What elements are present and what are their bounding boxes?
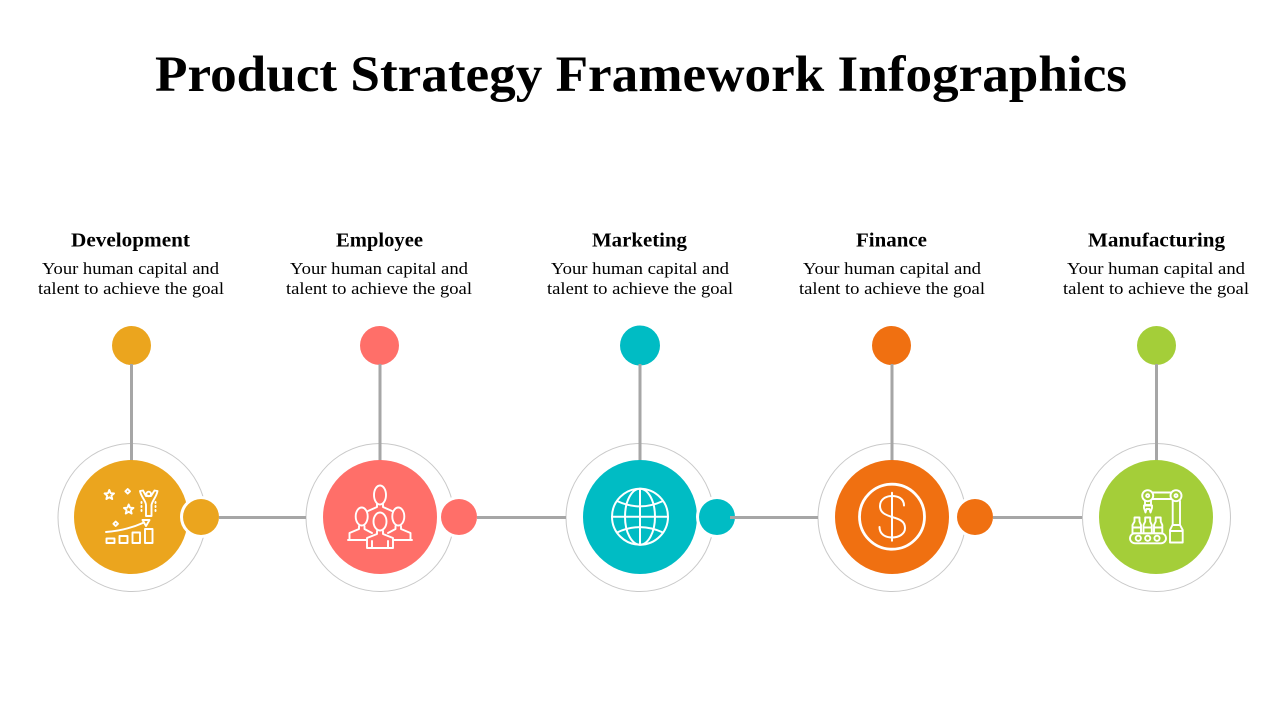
icon: team of people bbox=[348, 486, 412, 548]
step: manufacturing bbox=[1063, 230, 1249, 592]
side dot: employee bbox=[441, 499, 477, 535]
disc: manufacturing bbox=[1099, 460, 1213, 574]
text block: marketing bbox=[547, 259, 733, 298]
text block: employee: talent to achieve the goal bbox=[286, 279, 472, 298]
stem: marketing bbox=[638, 364, 642, 462]
top dot: finance bbox=[872, 326, 911, 365]
side dot: marketing bbox=[699, 499, 735, 535]
step: marketing bbox=[547, 230, 735, 592]
heading: marketing: Marketing bbox=[592, 230, 687, 252]
ring: employee bbox=[306, 444, 454, 592]
heading: manufacturing: Manufacturing bbox=[1088, 230, 1225, 252]
text block: finance: Your human capital and bbox=[803, 259, 982, 278]
disc: development bbox=[74, 460, 188, 574]
ring: manufacturing bbox=[1082, 444, 1230, 592]
text block: finance: talent to achieve the goal bbox=[799, 279, 985, 298]
connector: finance to manufacturing bbox=[993, 516, 1082, 519]
text block: finance bbox=[799, 259, 985, 298]
icon: success growth chart bbox=[105, 489, 158, 543]
step: finance bbox=[799, 230, 993, 592]
connector: marketing to finance bbox=[730, 516, 818, 519]
title: Product Strategy Framework Infographics bbox=[155, 47, 1127, 103]
icon: globe bbox=[612, 489, 668, 545]
stem: employee bbox=[378, 364, 382, 462]
step: employee bbox=[286, 230, 477, 592]
step: development bbox=[38, 230, 224, 592]
text block: manufacturing: talent to achieve the goal bbox=[1063, 279, 1249, 298]
top dot: employee bbox=[360, 326, 399, 365]
disc: employee bbox=[323, 460, 437, 574]
text block: development: talent to achieve the goal bbox=[38, 279, 224, 298]
text block: marketing: Your human capital and bbox=[551, 259, 730, 278]
side dot: development bbox=[183, 499, 219, 535]
text block: development: Your human capital and bbox=[42, 259, 220, 278]
top dot: manufacturing bbox=[1137, 326, 1176, 365]
stem: finance bbox=[890, 364, 894, 462]
text block: marketing: talent to achieve the goal bbox=[547, 279, 733, 298]
text block: manufacturing: Your human capital and bbox=[1067, 259, 1246, 278]
stem: manufacturing bbox=[1155, 364, 1158, 462]
top dot: development bbox=[112, 326, 151, 365]
disc: marketing bbox=[583, 460, 697, 574]
ring: marketing bbox=[566, 444, 714, 592]
disc: finance bbox=[835, 460, 949, 574]
icon: robotic arm and conveyor bbox=[1130, 490, 1183, 543]
heading: employee: Employee bbox=[336, 230, 423, 252]
ring: finance bbox=[818, 444, 966, 592]
icon: dollar coin bbox=[860, 484, 924, 549]
heading: development: Development bbox=[71, 230, 191, 252]
side dot: finance bbox=[957, 499, 993, 535]
connector: employee to marketing bbox=[477, 516, 566, 519]
ring: development bbox=[58, 444, 206, 592]
text block: employee bbox=[286, 259, 472, 298]
text block: employee: Your human capital and bbox=[290, 259, 469, 278]
top dot: marketing bbox=[620, 326, 660, 366]
text block: development bbox=[38, 259, 224, 298]
connector: development to employee bbox=[219, 516, 306, 519]
text block: manufacturing bbox=[1063, 259, 1249, 298]
stem: development bbox=[130, 364, 133, 462]
heading: finance: Finance bbox=[856, 230, 927, 252]
